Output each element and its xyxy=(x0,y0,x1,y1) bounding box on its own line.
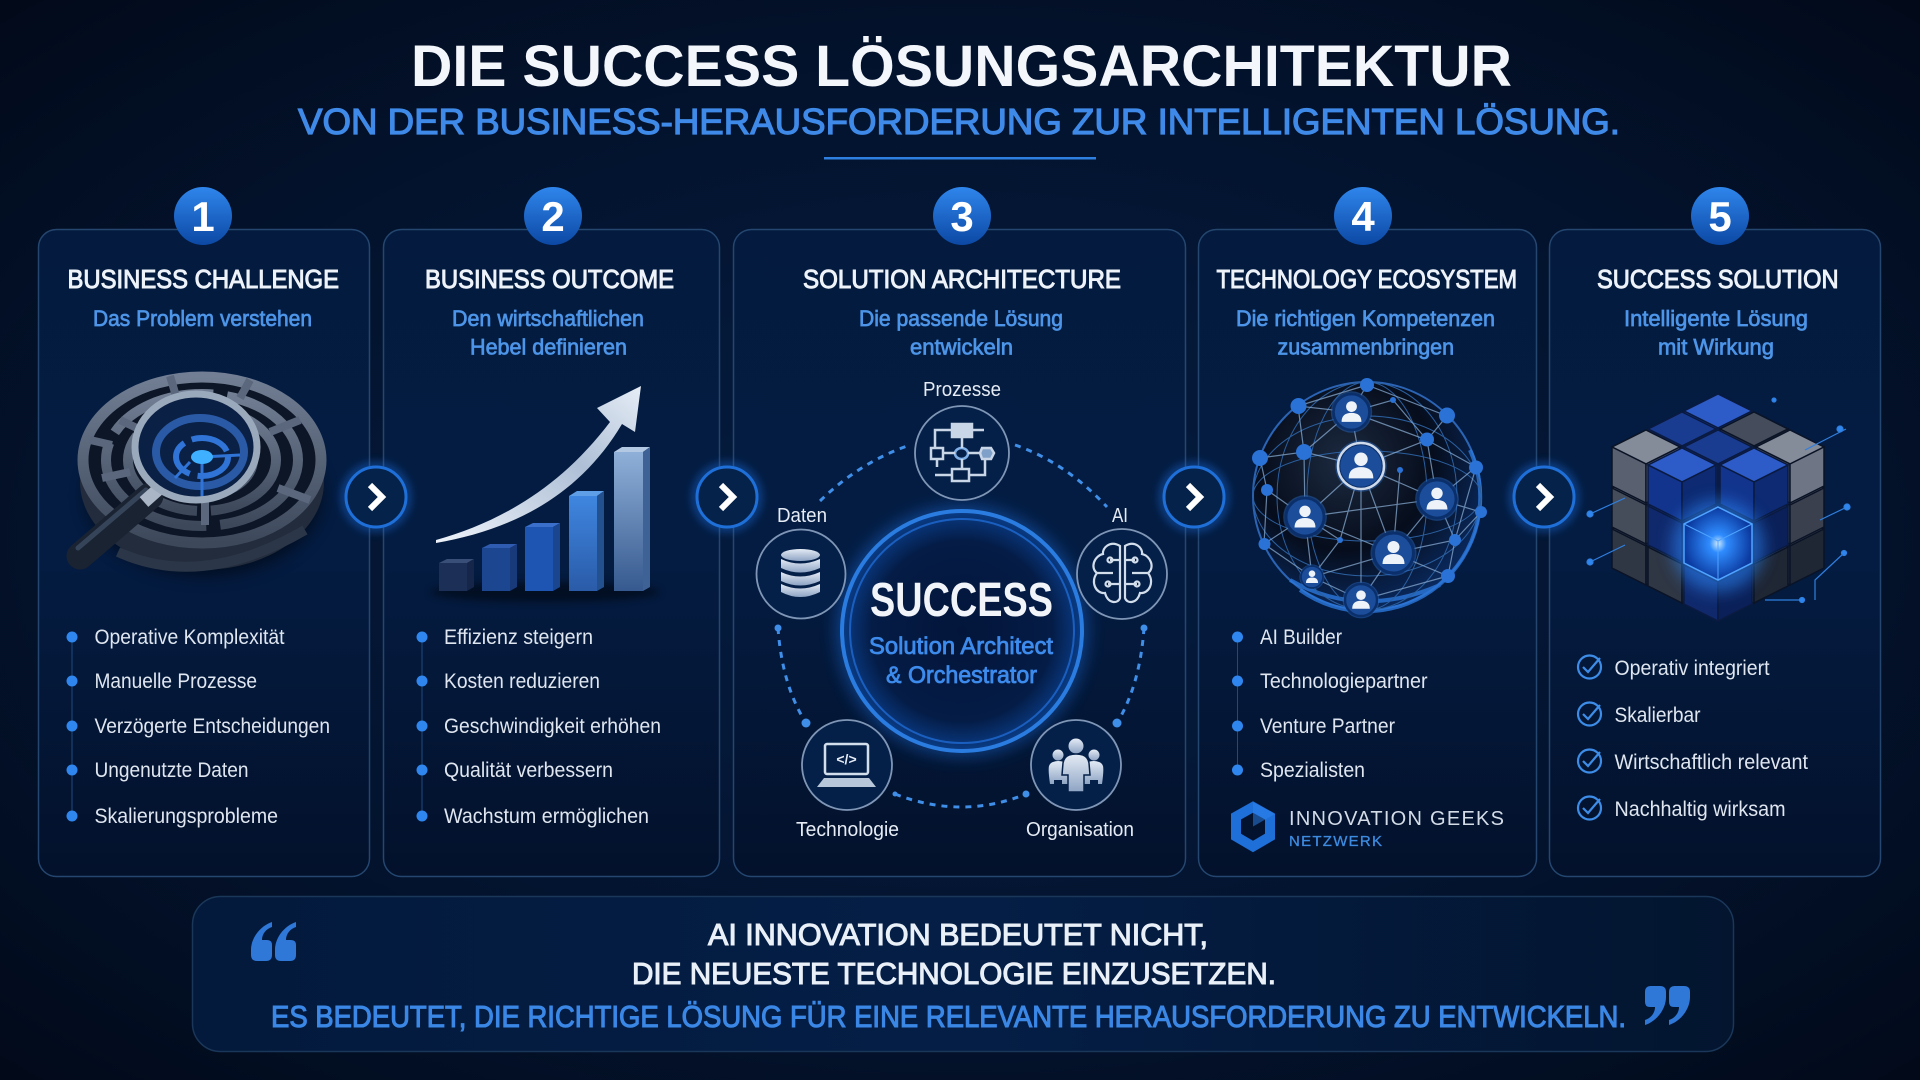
node: Prozesse: Prozesse xyxy=(923,379,1001,401)
hub: success core: Solution Architect xyxy=(869,633,1053,660)
bullet list xyxy=(416,626,661,828)
step number 5: 5 xyxy=(1708,193,1732,240)
logo: innovation geeks: NETZWERK xyxy=(1289,833,1382,850)
panel: success solution xyxy=(1550,187,1880,876)
tagline xyxy=(1236,306,1495,360)
node: AI: AI xyxy=(1112,505,1128,527)
node: Technologie xyxy=(796,720,899,841)
hub: success core: SUCCESS xyxy=(870,574,1053,627)
bullet list: Kosten reduzieren xyxy=(444,670,600,693)
node: Organisation: Organisation xyxy=(1026,819,1134,841)
panel: business outcome xyxy=(384,187,720,876)
icon: solution cube xyxy=(1587,394,1850,621)
bullet list: Qualität verbessern xyxy=(444,759,613,782)
check list: Nachhaltig wirksam xyxy=(1614,798,1786,821)
bullet list: AI Builder xyxy=(1260,626,1342,649)
title: DIE SUCCESS LÖSUNGSARCHITEKTUR xyxy=(411,34,1512,99)
bullet list: Skalierungsprobleme xyxy=(94,805,278,828)
step number 4: 4 xyxy=(1351,193,1375,240)
heading: TECHNOLOGY ECOSYSTEM xyxy=(1216,264,1517,294)
check list: Skalierbar xyxy=(1614,704,1701,727)
bullet list xyxy=(66,626,330,828)
heading: BUSINESS OUTCOME xyxy=(425,264,674,294)
quote text: AI INNOVATION BEDEUTET NICHT, xyxy=(708,917,1208,952)
arrow 4 to 5 xyxy=(1508,461,1580,533)
icon: opening quote mark xyxy=(251,922,296,961)
check list: Wirtschaftlich relevant xyxy=(1614,751,1808,774)
tagline xyxy=(1624,306,1808,360)
arrow 3 to 4 xyxy=(1158,461,1230,533)
panel: solution architecture xyxy=(734,187,1186,876)
hub: success core xyxy=(836,505,1088,757)
bullet list: Operative Komplexität xyxy=(94,626,285,649)
tagline: Die passende Lösung xyxy=(859,306,1063,331)
tagline: mit Wirkung xyxy=(1658,334,1774,360)
icon: maze with magnifier xyxy=(78,376,324,576)
node: Technologie: </> xyxy=(836,751,857,767)
step number 3 xyxy=(933,187,991,245)
bullet list: Spezialisten xyxy=(1260,759,1365,782)
heading: SUCCESS SOLUTION xyxy=(1597,264,1838,294)
step number 3: 3 xyxy=(950,193,974,240)
tagline: Hebel definieren xyxy=(470,334,627,360)
hub: success core: & Orchestrator xyxy=(886,662,1037,689)
step number 1 xyxy=(174,187,232,245)
tagline: Den wirtschaftlichen xyxy=(452,306,644,331)
quote text xyxy=(271,917,1626,1034)
quote text: ES BEDEUTET, DIE RICHTIGE LÖSUNG FÜR EINE RELEVANTE HERAUSFORDERUNG ZU ENTWICKELN. xyxy=(271,999,1626,1034)
arrow 1 to 2 xyxy=(340,461,412,533)
heading: BUSINESS CHALLENGE xyxy=(68,264,339,294)
tagline xyxy=(452,306,644,360)
tagline: Intelligente Lösung xyxy=(1624,306,1808,331)
tagline: Die richtigen Kompetenzen xyxy=(1236,306,1495,331)
panel: technology ecosystem xyxy=(1198,187,1536,876)
node: Daten: Daten xyxy=(777,505,827,527)
icon: network globe xyxy=(1252,378,1487,618)
tagline: zusammenbringen xyxy=(1278,334,1454,360)
quote text: DIE NEUESTE TECHNOLOGIE EINZUSETZEN. xyxy=(632,956,1276,991)
bullet list: Effizienz steigern xyxy=(444,626,593,649)
panel: business challenge xyxy=(38,187,370,876)
tagline: Das Problem verstehen xyxy=(93,306,312,331)
bullet list: Technologiepartner xyxy=(1260,670,1428,693)
subtitle: VON DER BUSINESS-HERAUSFORDERUNG ZUR INTELLIGENTEN LÖSUNG. xyxy=(298,101,1620,142)
chart: growth bars with arrow xyxy=(430,386,660,602)
tagline xyxy=(859,306,1063,360)
node: Technologie: Technologie xyxy=(796,819,899,841)
logo: innovation geeks xyxy=(1236,802,1504,850)
bullet list: Verzögerte Entscheidungen xyxy=(94,715,330,738)
bullet list xyxy=(1232,626,1428,782)
icon: closing quote mark xyxy=(1645,986,1690,1025)
node: Organisation xyxy=(1026,720,1134,841)
step number 2: 2 xyxy=(541,193,565,240)
heading: SOLUTION ARCHITECTURE xyxy=(803,264,1121,294)
panel: quote xyxy=(192,896,1734,1052)
check list xyxy=(1578,656,1808,821)
arrow 2 to 3 xyxy=(691,461,763,533)
bullet list: Geschwindigkeit erhöhen xyxy=(444,715,661,738)
node: Prozesse xyxy=(915,379,1009,500)
bullet list: Manuelle Prozesse xyxy=(94,670,257,693)
logo: innovation geeks: INNOVATION GEEKS xyxy=(1289,808,1504,830)
dashed orbit connectors xyxy=(774,445,1148,807)
step number 5 xyxy=(1691,187,1749,245)
tagline: entwickeln xyxy=(910,334,1013,360)
check list: Operativ integriert xyxy=(1614,657,1770,680)
bullet list: Wachstum ermöglichen xyxy=(444,805,649,828)
step number 2 xyxy=(524,187,582,245)
node: Daten xyxy=(756,505,846,618)
bullet list: Ungenutzte Daten xyxy=(94,759,248,782)
step number 4 xyxy=(1334,187,1392,245)
node: AI xyxy=(1077,505,1167,619)
step number 1: 1 xyxy=(191,193,215,240)
bullet list: Venture Partner xyxy=(1260,715,1395,738)
